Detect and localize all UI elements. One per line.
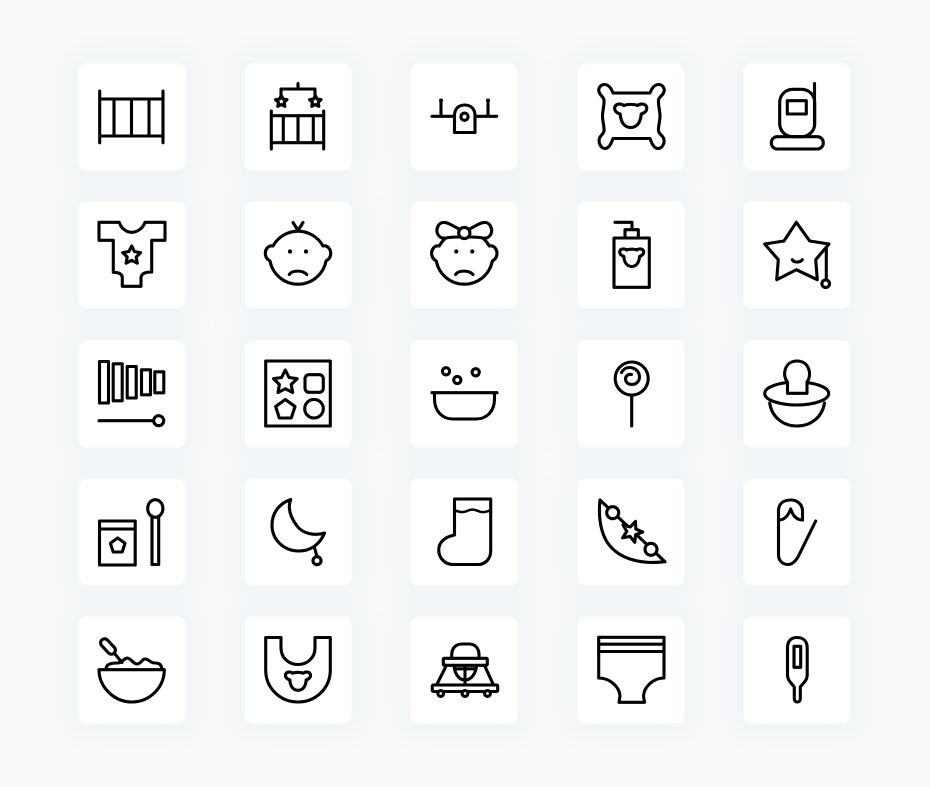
card: seesaw	[410, 64, 518, 170]
icon: baby walker	[432, 644, 498, 696]
card: baby monitor	[744, 64, 850, 170]
icon: onesie	[99, 222, 165, 286]
card: shape sorter	[244, 340, 352, 448]
card: porridge bowl	[78, 616, 186, 724]
card: pillow	[578, 64, 684, 170]
card: peas in a pod	[578, 478, 684, 586]
card: lotion bottle	[578, 202, 684, 308]
card: baby walker	[410, 616, 518, 724]
icon: baby monitor	[771, 84, 823, 149]
icon: shape sorter	[266, 361, 330, 426]
icon: sock	[439, 499, 491, 564]
icon: seesaw	[432, 98, 497, 132]
icon: crescent moon	[272, 500, 324, 565]
icon: crib	[100, 91, 163, 143]
icon: pacifier	[765, 361, 829, 426]
icon: lollipop	[615, 362, 648, 426]
icon: thermometer	[788, 638, 807, 702]
icon: baby food and spoon	[100, 500, 163, 565]
icon: bib	[266, 638, 330, 702]
card: onesie	[78, 202, 186, 308]
card: crib with mobile	[244, 64, 352, 170]
icon: xylophone	[99, 362, 164, 426]
icon: safety pin	[778, 500, 816, 564]
icon: star toy	[765, 222, 830, 288]
card: safety pin	[744, 478, 850, 586]
card: diaper	[578, 616, 684, 724]
card: baby boy face	[244, 202, 352, 308]
card: bib	[244, 616, 352, 724]
icon: crib with mobile	[271, 84, 324, 149]
card: crib	[78, 64, 186, 170]
icon: pillow	[599, 84, 664, 148]
card: pacifier	[744, 340, 850, 448]
card: sock	[410, 478, 518, 586]
card: bath bowl	[410, 340, 518, 448]
card: xylophone	[78, 340, 186, 448]
card: crescent moon	[244, 478, 352, 586]
icon: baby girl face	[432, 222, 497, 284]
icon: porridge bowl	[99, 637, 164, 702]
background glow behind cards	[62, 47, 867, 740]
card: baby girl face	[410, 202, 518, 308]
card: baby food and spoon	[78, 478, 186, 586]
icon: bath bowl	[432, 368, 497, 419]
icon: baby boy face	[265, 222, 331, 284]
card: lollipop	[578, 340, 684, 448]
card: star toy	[744, 202, 850, 308]
icon: lotion bottle	[614, 222, 649, 287]
icon: peas in a pod	[599, 500, 665, 562]
icon: diaper	[599, 637, 664, 702]
card: thermometer	[744, 616, 850, 724]
